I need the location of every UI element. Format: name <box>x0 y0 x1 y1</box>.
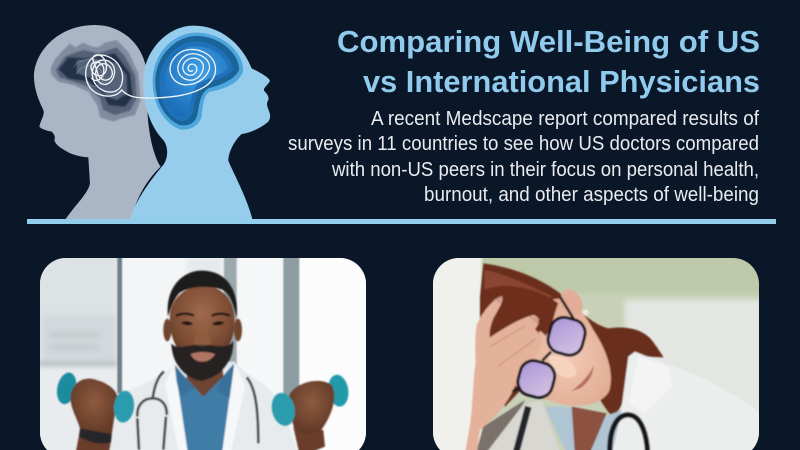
intro text: surveys in 11 countries to see how US doctors compared <box>288 133 759 155</box>
office background <box>433 258 759 450</box>
hand <box>464 296 541 450</box>
gray head with tangled brain <box>34 25 161 220</box>
hair <box>168 271 237 318</box>
ear <box>560 289 583 312</box>
stethoscope <box>137 372 258 450</box>
intro text: A recent Medscape report compared results of <box>371 108 759 130</box>
hospital background <box>30 250 373 450</box>
face <box>515 299 611 406</box>
nose and mouth <box>548 356 577 378</box>
fringe <box>483 286 558 338</box>
title: Comparing Well-Being of US <box>337 24 760 59</box>
face <box>168 286 236 348</box>
title <box>337 24 760 99</box>
glasses <box>545 314 588 358</box>
beard <box>171 341 233 381</box>
hair <box>480 263 664 417</box>
blue head with spiral brain <box>130 26 270 220</box>
divider rule <box>27 219 776 224</box>
eyes and brows <box>181 321 225 325</box>
intro text: burnout, and other aspects of well-being <box>424 184 759 206</box>
monitor edge <box>433 258 483 450</box>
title: vs International Physicians <box>363 64 760 99</box>
spiral and tangle connecting thread <box>73 49 215 98</box>
photo: doctor lifting dumbbells <box>30 250 373 450</box>
intro text: with non-US peers in their focus on personal health, <box>331 159 759 181</box>
lab coat <box>605 352 765 450</box>
doctor coat and shirt <box>120 270 296 450</box>
neck <box>187 360 223 397</box>
left dumbbell and hand <box>54 371 136 450</box>
photo: exhausted doctor with glasses <box>433 258 759 450</box>
illustration: two heads <box>34 25 270 220</box>
stethoscope <box>610 415 648 450</box>
right dumbbell and hand <box>269 373 350 450</box>
intro text <box>288 108 759 206</box>
ears <box>163 319 171 341</box>
blue shirt and neck <box>545 407 622 450</box>
